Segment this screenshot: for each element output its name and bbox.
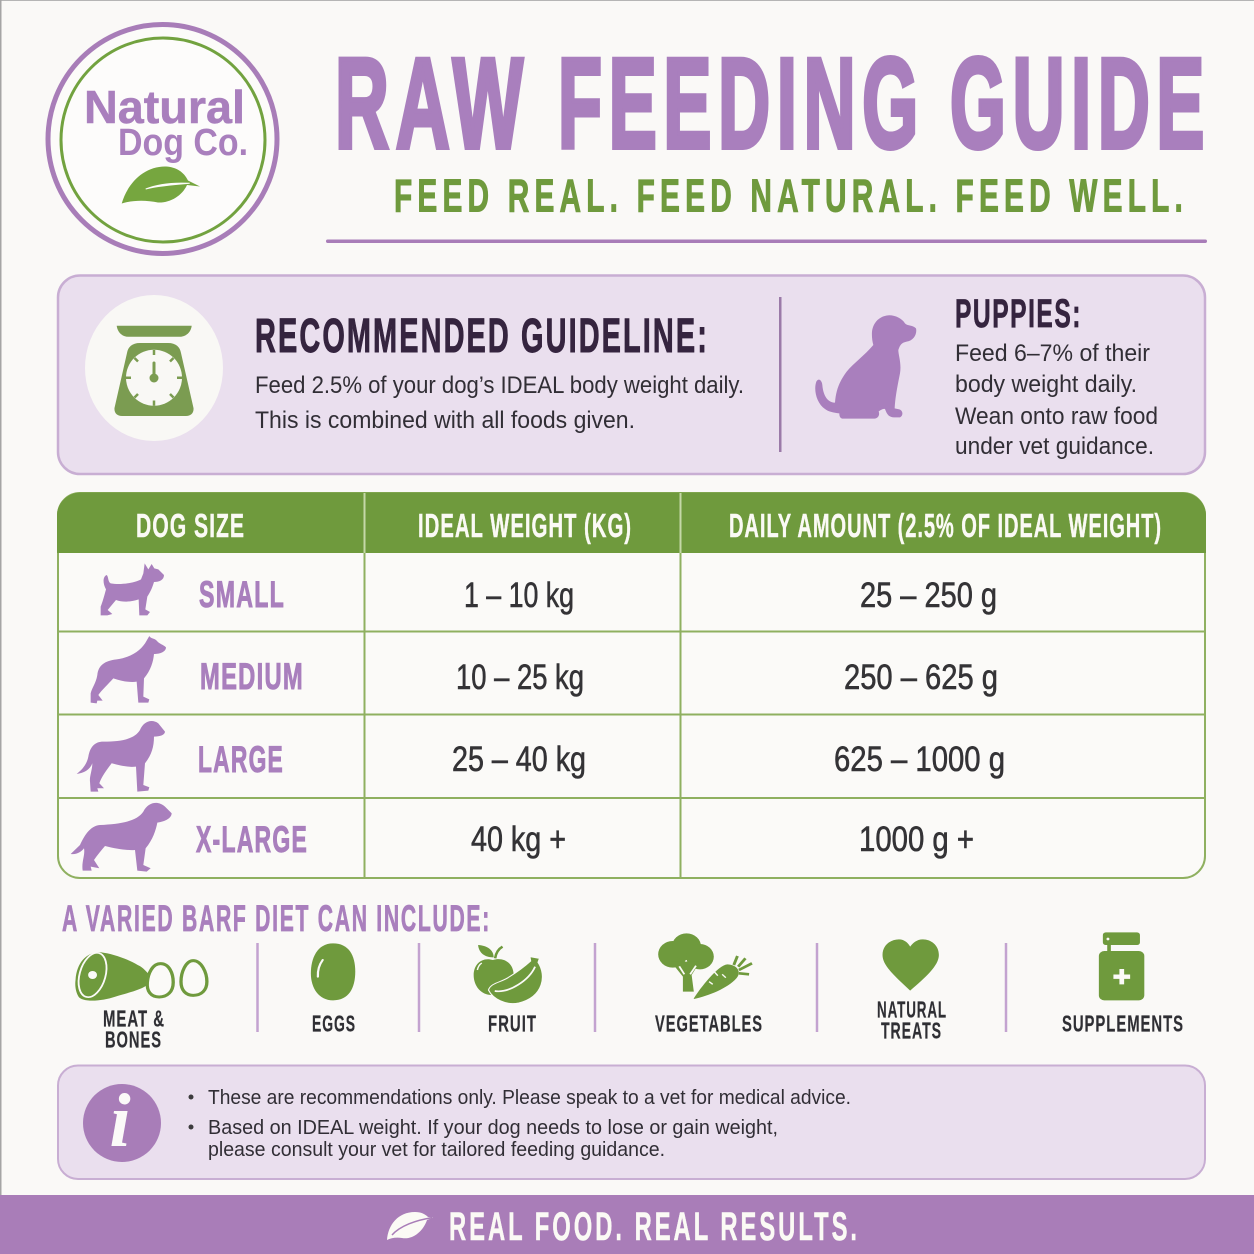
row: large	[77, 721, 1005, 792]
text: guideline body: Feed 2.5% of your dog’s IDEAL body weight daily.	[255, 372, 744, 399]
icon: x-large dog	[71, 803, 172, 872]
text: puppies body	[955, 340, 1158, 460]
food: fruit: FRUIT	[488, 1010, 537, 1036]
title: RAW	[335, 32, 530, 176]
food: natural treats: TREATS	[881, 1018, 942, 1044]
row: medium	[91, 636, 998, 703]
icon: large dog	[77, 721, 165, 792]
logo: Natural Dog Co.: Natural	[84, 81, 245, 133]
footer tagline: REAL FOOD. REAL RESULTS.	[449, 1205, 860, 1249]
row: x-large	[71, 803, 974, 872]
text: notes: Based on IDEAL weight. If your dog needs to lose or gain weight,	[208, 1117, 778, 1139]
food: supplements	[1062, 932, 1184, 1036]
text: puppies body: under vet guidance.	[955, 433, 1154, 460]
food: natural treats	[877, 939, 947, 1044]
icon: apple and banana	[474, 945, 542, 1004]
icon: supplement jar	[1099, 932, 1144, 1000]
table: feeding amounts	[57, 492, 1206, 878]
panel: recommended guideline and puppies	[58, 276, 1205, 474]
icon: small dog	[101, 563, 164, 615]
text: guideline body	[255, 372, 744, 434]
table header	[136, 507, 1162, 544]
row: large: LARGE	[198, 739, 284, 780]
food: vegetables	[655, 933, 763, 1036]
icon: info: i	[109, 1079, 131, 1163]
heading: varied BARF diet: A VARIED BARF DIET CAN INCLUDE:	[62, 898, 491, 939]
icon: meat and eggs	[74, 950, 207, 1001]
row: x-large: X-LARGE	[196, 819, 308, 860]
text: notes: These are recommendations only. Please speak to a vet for medical advice.	[208, 1087, 851, 1109]
row: large: 625 – 1000 g	[834, 740, 1005, 779]
row: x-large: 1000 g +	[859, 820, 974, 859]
icon: kitchen scale	[85, 295, 223, 441]
logo: Natural Dog Co.	[48, 24, 277, 254]
row: medium: MEDIUM	[200, 656, 304, 697]
row: small: 25 – 250 g	[860, 576, 997, 615]
text: notes	[188, 1087, 851, 1161]
food: fruit	[474, 945, 542, 1036]
heading: puppies: PUPPIES:	[955, 292, 1082, 336]
text: puppies body: body weight daily.	[955, 371, 1137, 398]
food: meat and bones	[74, 950, 207, 1052]
row: medium: 10 – 25 kg	[456, 658, 584, 697]
icon: leaf	[387, 1212, 433, 1240]
food: eggs: EGGS	[312, 1010, 356, 1036]
icon: info	[83, 1079, 161, 1163]
food: meat and bones: BONES	[105, 1026, 162, 1052]
text: puppies body: Wean onto raw food	[955, 403, 1158, 430]
footer banner	[0, 1195, 1254, 1254]
icon: puppy	[815, 315, 916, 419]
text: notes: please consult your vet for tailored feeding guidance.	[208, 1139, 665, 1161]
icon: medium dog	[91, 636, 166, 703]
text: puppies body: Feed 6–7% of their	[955, 340, 1150, 367]
row: x-large: 40 kg +	[471, 820, 566, 859]
icon: egg	[311, 943, 355, 1000]
food: supplements: SUPPLEMENTS	[1062, 1010, 1184, 1036]
row: large: 25 – 40 kg	[452, 740, 586, 779]
text: guideline body: This is combined with all foods given.	[255, 407, 635, 434]
row: medium: 250 – 625 g	[844, 658, 998, 697]
row: small	[101, 563, 997, 615]
food: eggs	[311, 943, 356, 1036]
heading: recommended guideline: RECOMMENDED GUIDELINE:	[255, 310, 709, 363]
table header: DOG SIZE	[136, 507, 245, 544]
logo: Natural Dog Co.: Dog Co.	[118, 122, 248, 164]
icon: broccoli and carrot	[658, 933, 752, 999]
row: small: SMALL	[199, 574, 285, 615]
food: meat and bones: MEAT &	[103, 1006, 165, 1032]
title: FEEDING	[558, 32, 925, 176]
food: vegetables: VEGETABLES	[655, 1010, 763, 1036]
row: small: 1 – 10 kg	[464, 576, 574, 615]
table header: IDEAL WEIGHT (KG)	[418, 507, 632, 544]
icon: heart	[883, 939, 939, 991]
panel: info note	[58, 1066, 1205, 1179]
food: natural treats: NATURAL	[877, 996, 947, 1022]
